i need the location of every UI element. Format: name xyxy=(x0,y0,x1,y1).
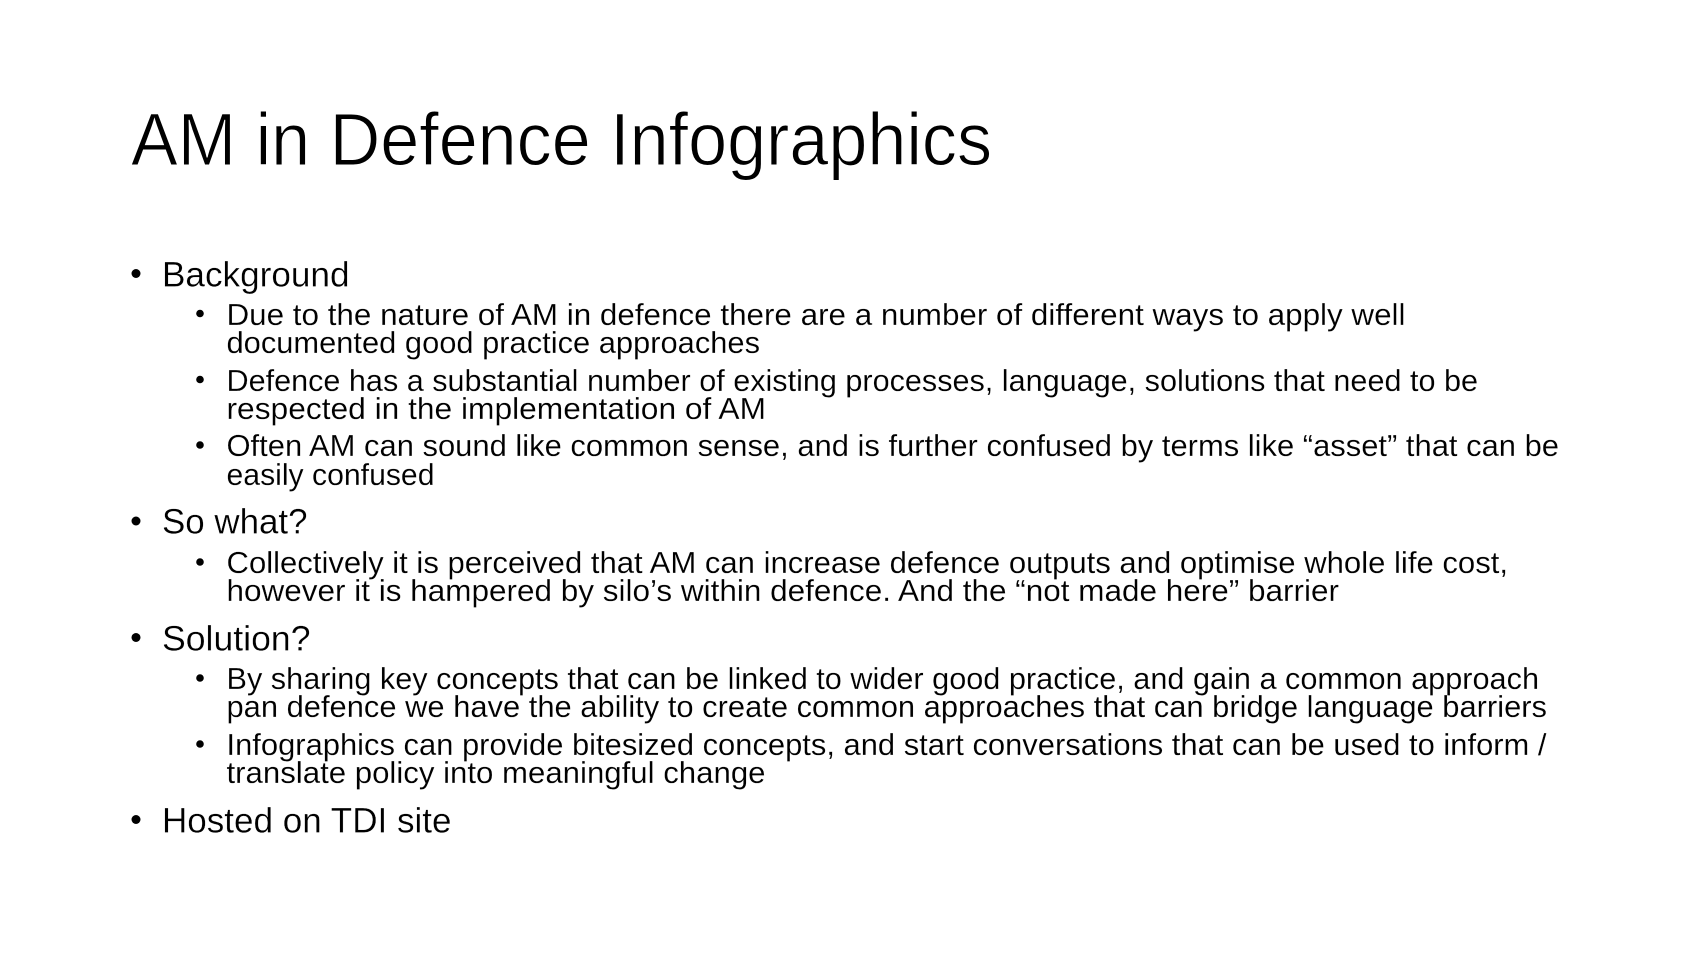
text block: sharing key concepts: By sharing key concepts that can be linked to wider good practice, and gain a common approach xyxy=(226,661,1539,696)
text block: common sense: easily confused xyxy=(226,457,434,492)
text block: nature of AM xyxy=(196,297,1406,360)
text block: silos: Collectively it is perceived that AM can increase defence outputs and optimise whole life cost, xyxy=(226,545,1508,580)
text block: existing processes: Defence has a substantial number of existing processes, language, solutions that need to be xyxy=(226,363,1478,398)
text block: existing processes xyxy=(196,363,1478,426)
heading: Solution?: Solution? xyxy=(162,620,310,658)
text block: sharing key concepts: pan defence we have the ability to create common approaches that can bridge language barriers xyxy=(226,689,1547,724)
text block: existing processes: respected in the implementation of AM xyxy=(226,391,766,426)
text block: bitesized concepts: Infographics can provide bitesized concepts, and start conversations that can be used to inform / xyxy=(226,727,1547,762)
text block: nature of AM: Due to the nature of AM in defence there are a number of different ways to apply well xyxy=(226,297,1406,332)
text block: silos xyxy=(196,545,1508,608)
text block: sharing key concepts xyxy=(196,661,1547,724)
text block: bitesized concepts xyxy=(196,727,1547,790)
heading: So what?: So what? xyxy=(162,502,308,542)
title: AM in Defence Infographics xyxy=(131,98,992,181)
text block: common sense xyxy=(196,428,1559,492)
heading: Hosted on TDI site: Hosted on TDI site xyxy=(162,802,451,840)
text block: common sense: Often AM can sound like common sense, and is further confused by terms like “asset” that can be xyxy=(226,428,1559,463)
panel: bullet list xyxy=(132,256,1559,840)
text block: silos: however it is hampered by silo’s within defence. And the “not made here” barrier xyxy=(226,573,1339,608)
text block: bitesized concepts: translate policy into meaningful change xyxy=(226,755,766,790)
heading: Background: Background xyxy=(162,256,350,294)
text block: nature of AM: documented good practice approaches xyxy=(226,325,760,360)
